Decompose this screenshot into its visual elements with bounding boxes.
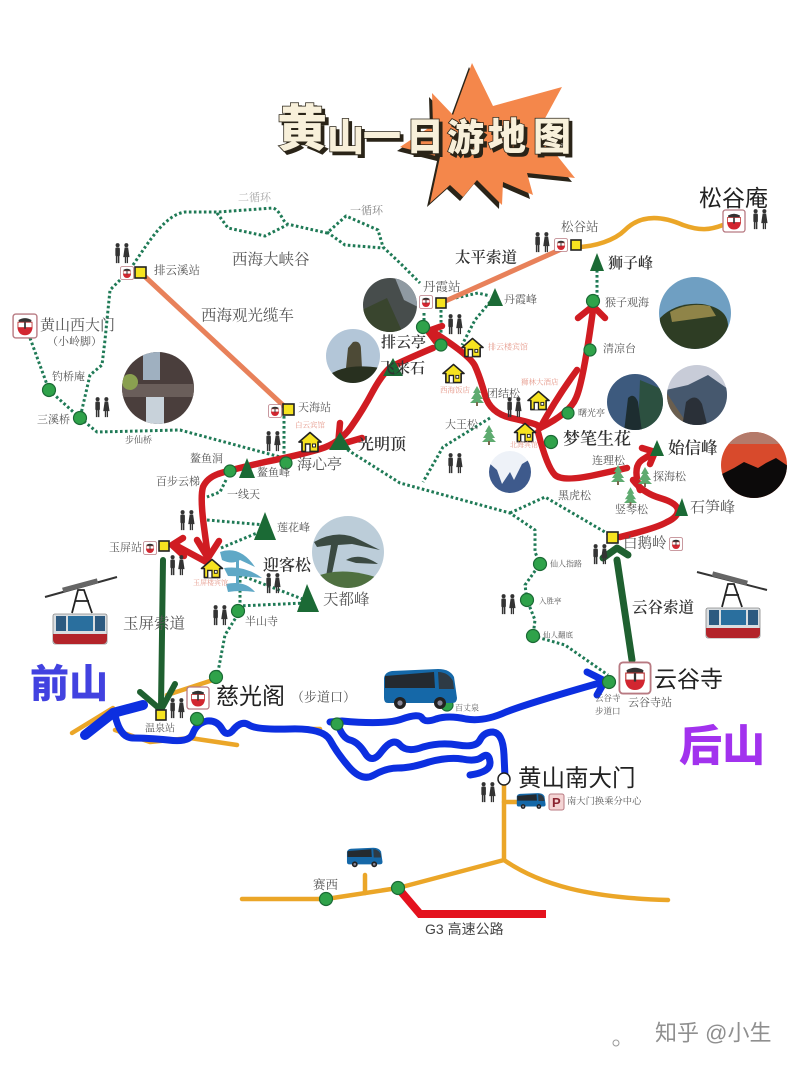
photo: welcoming pine: [312, 516, 384, 590]
labels: central and east area: 始信峰: [668, 438, 718, 458]
labels: central and east area: 北海宾馆: [510, 440, 538, 449]
photo: monkey watching sea: [659, 277, 731, 349]
labels: west area: 西海观光缆车: [201, 306, 294, 324]
labels: central and east area: 入胜亭: [539, 596, 562, 606]
labels: west area: 海心亭: [297, 456, 342, 473]
labels: central and east area: 猴子观海: [605, 295, 649, 309]
labels: south area: 南大门换乘分中心: [567, 795, 642, 807]
icon: welcoming pine: [220, 550, 262, 592]
labels: west area: 西海大峡谷: [232, 250, 310, 268]
region label: front mountain: 前山: [30, 664, 108, 706]
icon: cable car west: [45, 577, 117, 644]
photo: pen peak: [606, 373, 664, 432]
aerial tramways: [140, 247, 566, 408]
labels: central and east area: 黑虎松: [558, 488, 592, 502]
icon: cable car east: [697, 571, 767, 638]
labels: west area: （步道口）: [291, 690, 356, 704]
labels: central and east area: 飞来石: [380, 359, 425, 377]
labels: central and east area: 丹霞峰: [504, 292, 537, 306]
labels: west area: 一循环: [350, 204, 384, 217]
labels: west area: 半山寺: [245, 614, 278, 628]
photo: snowy peaks: [489, 451, 531, 493]
title text: 山: [327, 118, 364, 158]
roads: [72, 218, 723, 900]
photo: flying stone: [326, 329, 380, 383]
green waypoint dots: [42, 294, 616, 906]
labels: central and east area: 云谷寺: [654, 666, 723, 692]
labels: central and east area: 连理松: [592, 453, 626, 467]
photo: rock cliff: [363, 278, 417, 332]
starburst: [397, 63, 575, 209]
labels: south area: 赛西: [313, 877, 339, 892]
labels: central and east area: 排云楼宾馆: [488, 342, 528, 352]
labels: west area: 百步云梯: [156, 474, 200, 488]
title text: 一: [363, 117, 401, 159]
太平 cable: [441, 247, 566, 303]
region label: back mountain: 后山: [679, 723, 765, 771]
labels: central and east area: 竖琴松: [615, 502, 649, 516]
icon: parking sign: [549, 794, 564, 810]
labels: central and east area: 松谷庵: [699, 185, 768, 211]
labels: west area: 白云宾馆: [295, 420, 325, 430]
labels: central and east area: 探海松: [653, 469, 687, 483]
labels: west area: 二循环: [238, 191, 272, 204]
labels: central and east area: 太平索道: [455, 248, 518, 266]
labels: central and east area: 云谷索道: [632, 598, 695, 616]
peak markers: [239, 253, 688, 612]
labels: west area: 排云溪站: [154, 263, 200, 277]
photo: mountains: [667, 365, 727, 425]
labels: west area: 光明顶: [358, 436, 407, 454]
title text: 图: [533, 117, 571, 159]
pine markers: [470, 386, 652, 506]
labels: west area: 玉屏站: [109, 540, 142, 554]
labels: central and east area: 百丈泉: [455, 702, 479, 712]
south gate circle: [498, 773, 510, 785]
labels: south area: [313, 765, 642, 937]
labels: central and east area: 清凉台: [603, 341, 636, 355]
photo: sunset: [720, 430, 788, 501]
labels: west area: 迎客松: [263, 556, 312, 574]
labels: central and east area: 云谷寺: [595, 693, 621, 703]
title text: 游: [447, 116, 484, 158]
labels: south area: G3 高速公路: [425, 921, 504, 937]
labels: west area: 步仙桥: [125, 434, 152, 445]
toilet icons: [95, 209, 768, 802]
labels: central and east area: 石笋峰: [690, 499, 735, 516]
labels: central and east area: 排云亭: [381, 333, 426, 351]
watermark: 知乎 @小生: [655, 1020, 771, 1046]
photo: stone bridge: [122, 352, 194, 424]
title: [277, 63, 575, 209]
red hiking route: [172, 306, 678, 565]
icon: south gate bus: [517, 793, 546, 809]
blue bus route: [85, 672, 605, 777]
G3 expressway: [398, 888, 546, 914]
labels: west area: 玉屏楼宾馆: [193, 578, 228, 587]
labels: west area: [37, 191, 407, 734]
labels: west area: 钓桥庵: [52, 369, 85, 383]
labels: south area: 黄山南大门: [518, 765, 636, 791]
labels: west area: 鳌鱼峰: [257, 465, 290, 479]
icon: highway bus: [347, 848, 383, 867]
title text: 地: [488, 117, 526, 159]
labels: central and east area: 仙人翻底: [543, 630, 573, 640]
labels: west area: 天都峰: [323, 590, 370, 608]
labels: central and east area: 丹霞站: [423, 279, 461, 294]
labels: central and east area: 梦笔生花: [563, 428, 631, 448]
labels: central and east area: 团结松: [487, 386, 521, 400]
dotted walking trails: [30, 208, 610, 677]
title text: 日: [406, 117, 444, 159]
hotel icons: [202, 338, 549, 578]
西海 cable: [140, 272, 286, 408]
cableway arrow: 玉屏: [140, 560, 175, 710]
cable station gate icons: [13, 210, 745, 709]
labels: west area: 温泉站: [145, 722, 175, 734]
labels: central and east area: 松谷站: [561, 219, 599, 234]
title text: 黄: [277, 101, 327, 157]
labels: west area: 三溪桥: [37, 412, 70, 426]
labels: west area: 莲花峰: [277, 520, 310, 534]
labels: west area: 黄山西大门: [40, 316, 115, 334]
labels: west area: 鳌鱼洞: [190, 451, 223, 465]
labels: west area: 慈光阁: [216, 683, 285, 709]
labels: central and east area: 西海饭店: [440, 384, 470, 394]
labels: central and east area: 曙光亭: [578, 407, 605, 418]
labels: central and east area: 云谷寺站: [628, 695, 672, 709]
labels: central and east area: 大王松: [445, 417, 479, 431]
labels: central and east area: [380, 185, 768, 716]
labels: central and east area: 步道口: [595, 706, 621, 716]
title text: [277, 101, 571, 159]
icon: large tour bus: [384, 669, 457, 709]
labels: central and east area: 狮林大酒店: [521, 376, 559, 386]
labels: west area: （小岭脚）: [47, 334, 102, 348]
labels: west area: 天海站: [298, 400, 331, 414]
labels: central and east area: 狮子峰: [608, 255, 653, 272]
labels: central and east area: 白鹅岭: [623, 535, 666, 552]
icon: parking sign: P: [552, 795, 561, 810]
labels: central and east area: 仙人指路: [550, 558, 582, 568]
labels: west area: 一线天: [227, 487, 260, 501]
yellow station squares: [135, 240, 618, 720]
cableway arrow: 云谷: [603, 548, 632, 660]
labels: west area: 玉屏索道: [123, 614, 185, 632]
